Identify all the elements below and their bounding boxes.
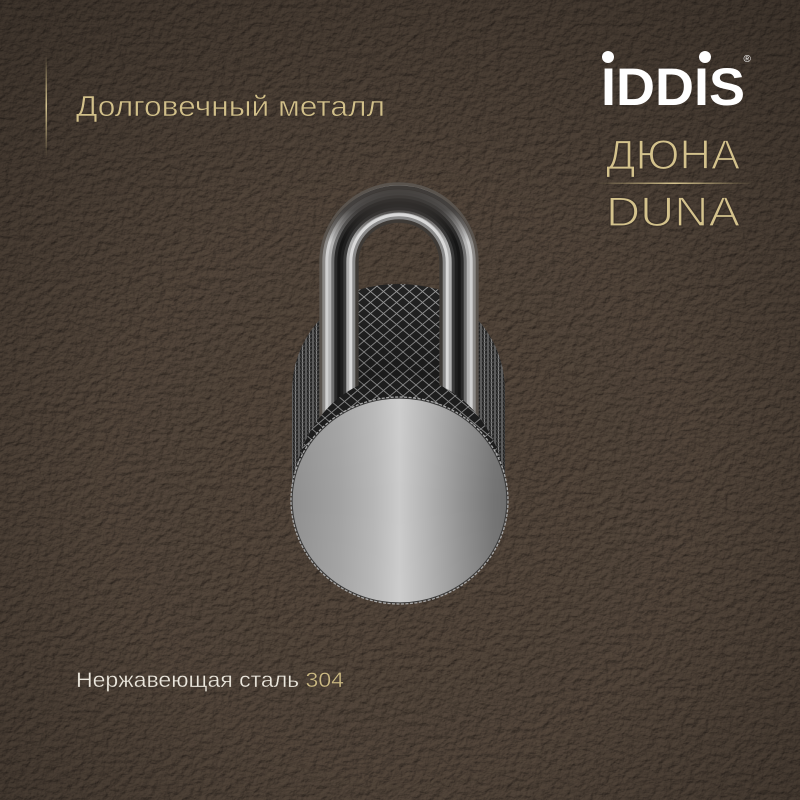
knurled body: side surfaces — [292, 285, 505, 500]
logo: IDDIS: ® — [744, 54, 752, 65]
shackle: polished metal loop — [321, 184, 477, 420]
caption: material: Нержавеющая сталь 304 — [76, 669, 344, 692]
heading: Долговечный металл — [76, 91, 385, 123]
divider: horizontal gold line — [595, 182, 753, 184]
body shading — [358, 284, 440, 500]
disc: brushed steel end cap — [292, 398, 507, 603]
knurled body: centre surface behind shackle — [358, 284, 440, 500]
accent: vertical gold line — [46, 55, 47, 157]
series name: Russian: ДЮНА — [606, 131, 740, 178]
logo: IDDIS: IDDIS — [601, 58, 745, 117]
disc rim: serrated edge — [291, 397, 508, 604]
knurled collar around disc — [294, 376, 504, 475]
series name: Latin: DUNA — [606, 188, 740, 235]
product: knurled metal handle with shackle and disc — [290, 182, 509, 605]
